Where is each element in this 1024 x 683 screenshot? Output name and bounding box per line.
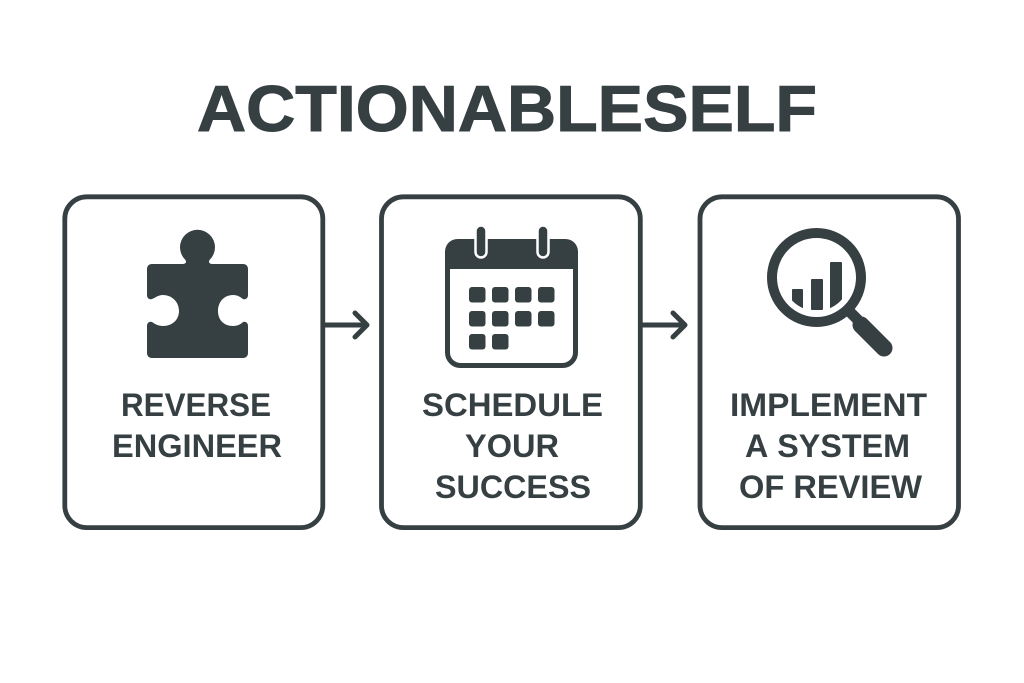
arrow: step one to two	[325, 313, 367, 337]
title: ACTIONABLESELF	[197, 72, 817, 145]
panel border	[65, 197, 323, 528]
label: implement a system of review	[730, 387, 927, 505]
label: reverse engineer: REVERSE	[121, 387, 271, 423]
arrow: step two to three	[642, 313, 685, 337]
label: implement a system of review: A SYSTEM	[745, 428, 910, 464]
label: schedule your success: YOUR	[465, 428, 559, 464]
panel: implement a system of review	[700, 197, 958, 528]
label: implement a system of review: IMPLEMENT	[730, 387, 927, 423]
infographic	[62, 85, 961, 530]
label: schedule your success	[422, 387, 603, 505]
label: reverse engineer: ENGINEER	[112, 428, 282, 464]
label: schedule your success: SUCCESS	[435, 469, 591, 505]
label: implement a system of review: OF REVIEW	[739, 469, 923, 505]
panel border	[700, 197, 958, 528]
label: schedule your success: SCHEDULE	[422, 387, 603, 423]
icon: magnifying glass with bar chart	[772, 233, 884, 348]
panel border	[382, 197, 640, 528]
icon: puzzle piece	[147, 230, 248, 358]
icon: calendar	[445, 226, 578, 366]
panel: reverse engineer	[65, 197, 323, 528]
label: reverse engineer	[112, 387, 282, 464]
panel: schedule your success	[382, 197, 640, 528]
